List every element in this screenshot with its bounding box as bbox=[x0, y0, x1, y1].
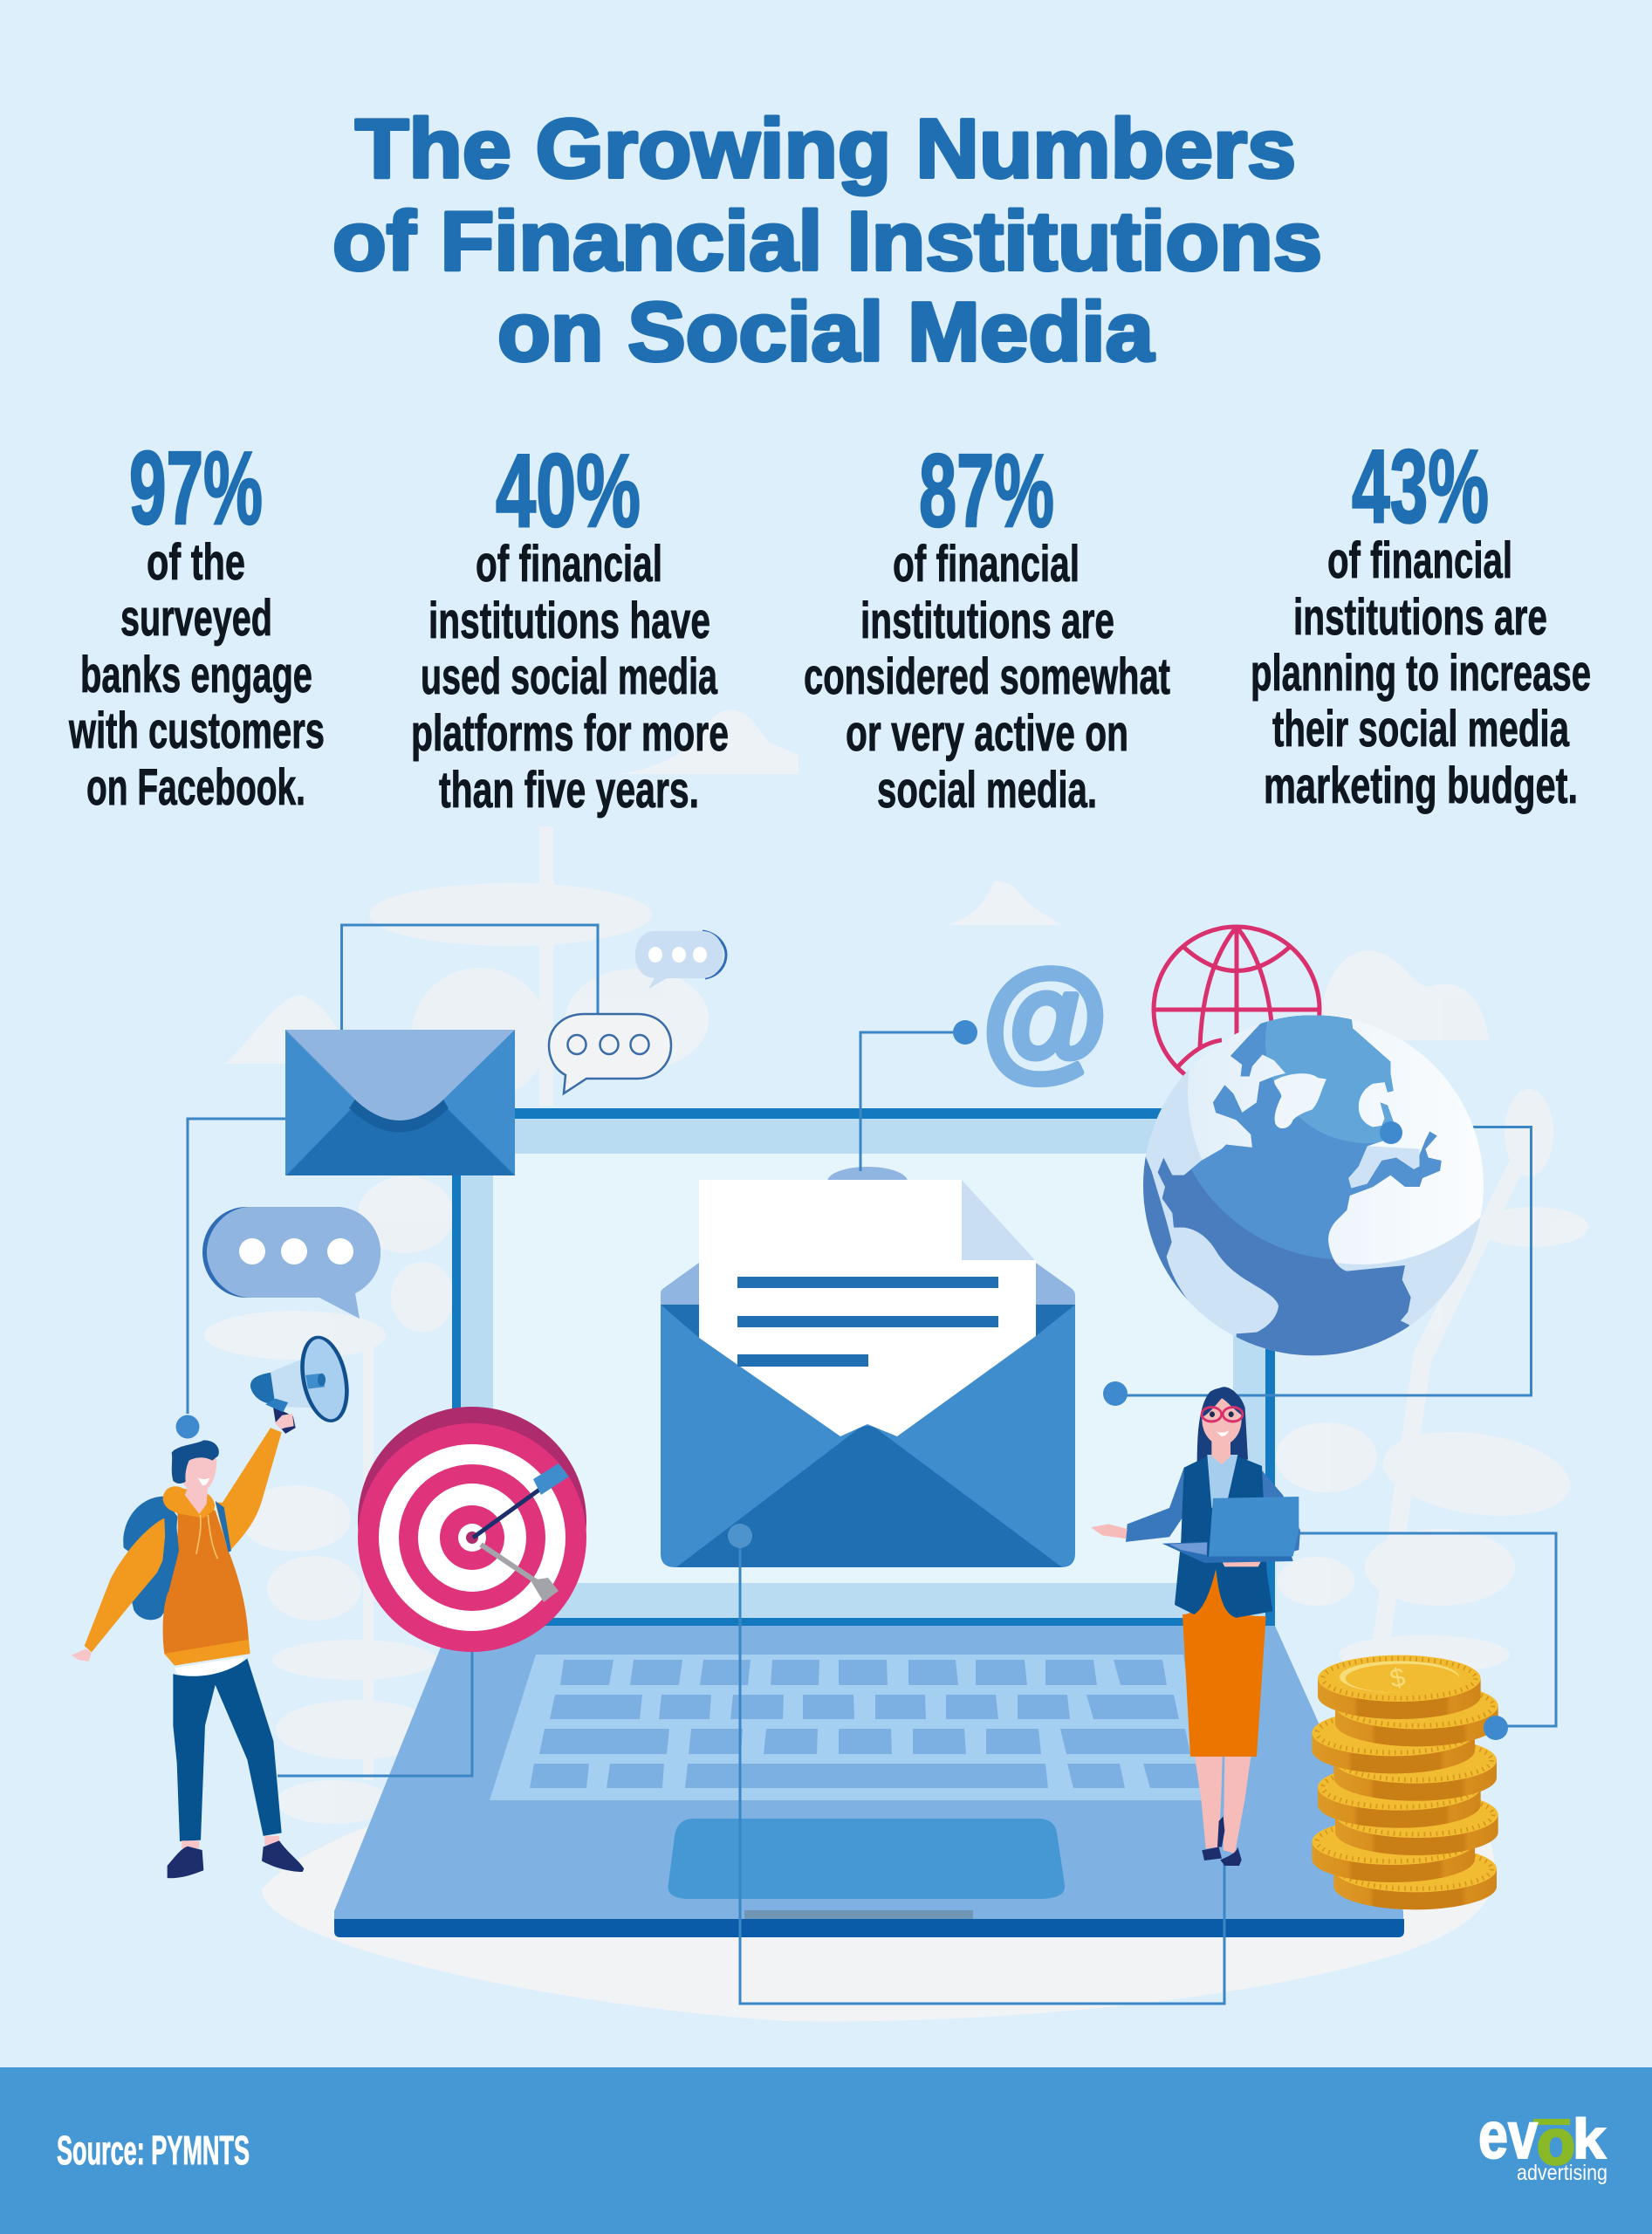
straps bbox=[151, 1501, 231, 1604]
stat: 87%: of financial bbox=[893, 536, 1080, 593]
arm right bbox=[216, 1428, 282, 1551]
hand bbox=[1091, 1524, 1128, 1538]
smile bbox=[1216, 1430, 1229, 1436]
stat: 87%: considered somewhat bbox=[804, 648, 1170, 705]
sleeves bbox=[1126, 1468, 1300, 1559]
laptop base bbox=[334, 1626, 1403, 1920]
stat: 97%: of the bbox=[147, 534, 245, 591]
neck bbox=[185, 1485, 208, 1514]
megaphone bbox=[250, 1335, 353, 1434]
stat: 43%: institutions are bbox=[1293, 589, 1547, 646]
stat: 97%: banks engage bbox=[80, 647, 312, 703]
speech bubble: small top bbox=[635, 931, 726, 989]
hand left bbox=[72, 1649, 92, 1662]
letter paper bbox=[699, 1180, 1036, 1436]
stat: 97%: 97% bbox=[129, 430, 263, 546]
touchpad bbox=[668, 1819, 1065, 1899]
laptop bbox=[334, 1108, 1404, 1937]
laptop screen bbox=[452, 1108, 1275, 1626]
jeans bbox=[173, 1658, 282, 1841]
stat: 43% bbox=[1251, 428, 1591, 814]
stat: 43%: 43% bbox=[1352, 428, 1489, 545]
arm left bbox=[85, 1518, 166, 1652]
footer bar bbox=[0, 2067, 1652, 2234]
stat: 40%: used social media bbox=[421, 648, 718, 705]
hair back bbox=[1197, 1388, 1248, 1464]
stat: 87%: or very active on bbox=[846, 705, 1128, 762]
shoes bbox=[1202, 1816, 1242, 1866]
hem bbox=[164, 1640, 250, 1666]
shirt bbox=[1207, 1455, 1237, 1508]
laptop hinge bbox=[744, 1910, 973, 1919]
jacket bbox=[1175, 1456, 1272, 1618]
open email envelope bbox=[661, 1167, 1075, 1567]
speech bubble: large filled bbox=[202, 1207, 380, 1319]
icon: earth globe bbox=[1143, 1016, 1484, 1356]
title bbox=[332, 102, 1322, 379]
hair bbox=[172, 1440, 219, 1484]
stat: 87% bbox=[804, 433, 1170, 819]
title: The Growing Numbers bbox=[355, 102, 1296, 195]
legs bbox=[1195, 1757, 1251, 1854]
stat: 97%: on Facebook. bbox=[86, 759, 305, 816]
stat: 97% bbox=[68, 430, 325, 816]
stat: 40% bbox=[411, 433, 729, 819]
stat: 43%: of financial bbox=[1327, 532, 1512, 589]
ground shadow blob bbox=[262, 1824, 1495, 2021]
icon: wireframe globe bbox=[1154, 927, 1320, 1093]
stat: 40%: institutions have bbox=[428, 593, 710, 649]
envelope front flap bbox=[676, 1426, 1062, 1567]
icon: closed envelope bbox=[285, 1030, 515, 1175]
neck and face bbox=[1211, 1434, 1230, 1464]
evok advertising logo: ev bbox=[1478, 2099, 1538, 2173]
stat: 97%: surveyed bbox=[120, 590, 272, 647]
letter text lines bbox=[737, 1277, 998, 1367]
bangs bbox=[1202, 1387, 1245, 1417]
backpack bbox=[123, 1497, 177, 1620]
keyboard bbox=[490, 1655, 1205, 1800]
drawstrings bbox=[196, 1515, 217, 1559]
connector lines bbox=[188, 925, 1556, 2004]
connector dots bbox=[176, 1020, 1508, 1740]
stat: 40%: than five years. bbox=[439, 762, 699, 819]
evok advertising logo: o bbox=[1537, 2108, 1575, 2178]
coin stack: $ bbox=[1388, 1662, 1409, 1694]
glasses bbox=[1202, 1408, 1243, 1422]
skirt bbox=[1182, 1569, 1266, 1757]
smile bbox=[198, 1477, 209, 1485]
title: on Social Media bbox=[497, 285, 1155, 379]
ankles bbox=[182, 1836, 279, 1848]
stat: 40%: 40% bbox=[496, 433, 641, 549]
torso bbox=[163, 1511, 249, 1663]
background plants and clouds bbox=[204, 709, 1588, 1824]
hood bbox=[163, 1486, 215, 1518]
eyes bbox=[1210, 1411, 1215, 1417]
icon: at sign: @ bbox=[983, 943, 1107, 1092]
stat: 40%: platforms for more bbox=[411, 705, 729, 762]
title: of Financial Institutions bbox=[332, 195, 1322, 288]
waist skin bbox=[1222, 1561, 1261, 1566]
stat: 40%: of financial bbox=[476, 536, 662, 593]
stat: 87%: social media. bbox=[877, 762, 1097, 819]
hand right bbox=[275, 1414, 294, 1429]
evok advertising logo: k bbox=[1573, 2107, 1606, 2170]
speech bubble: outlined bbox=[549, 1014, 671, 1093]
face bbox=[179, 1453, 216, 1492]
evok advertising logo: advertising bbox=[1517, 2161, 1607, 2185]
shirt bbox=[175, 1657, 244, 1676]
evok advertising logo bbox=[1478, 2099, 1607, 2185]
icon: target with arrow bbox=[358, 1407, 586, 1652]
shoes bbox=[168, 1840, 304, 1878]
person: man with megaphone bbox=[72, 1335, 353, 1878]
source text: Source: PYMNTS bbox=[57, 2128, 250, 2173]
laptop held bbox=[1209, 1497, 1299, 1557]
stat: 87%: institutions are bbox=[860, 593, 1114, 649]
stat: 87%: 87% bbox=[919, 433, 1054, 549]
man figure bbox=[72, 1414, 304, 1878]
laptop front edge bbox=[334, 1919, 1404, 1937]
coin stack bbox=[1312, 1655, 1498, 1909]
person: woman with laptop bbox=[1091, 1387, 1300, 1866]
stat: 97%: with customers bbox=[68, 702, 325, 759]
